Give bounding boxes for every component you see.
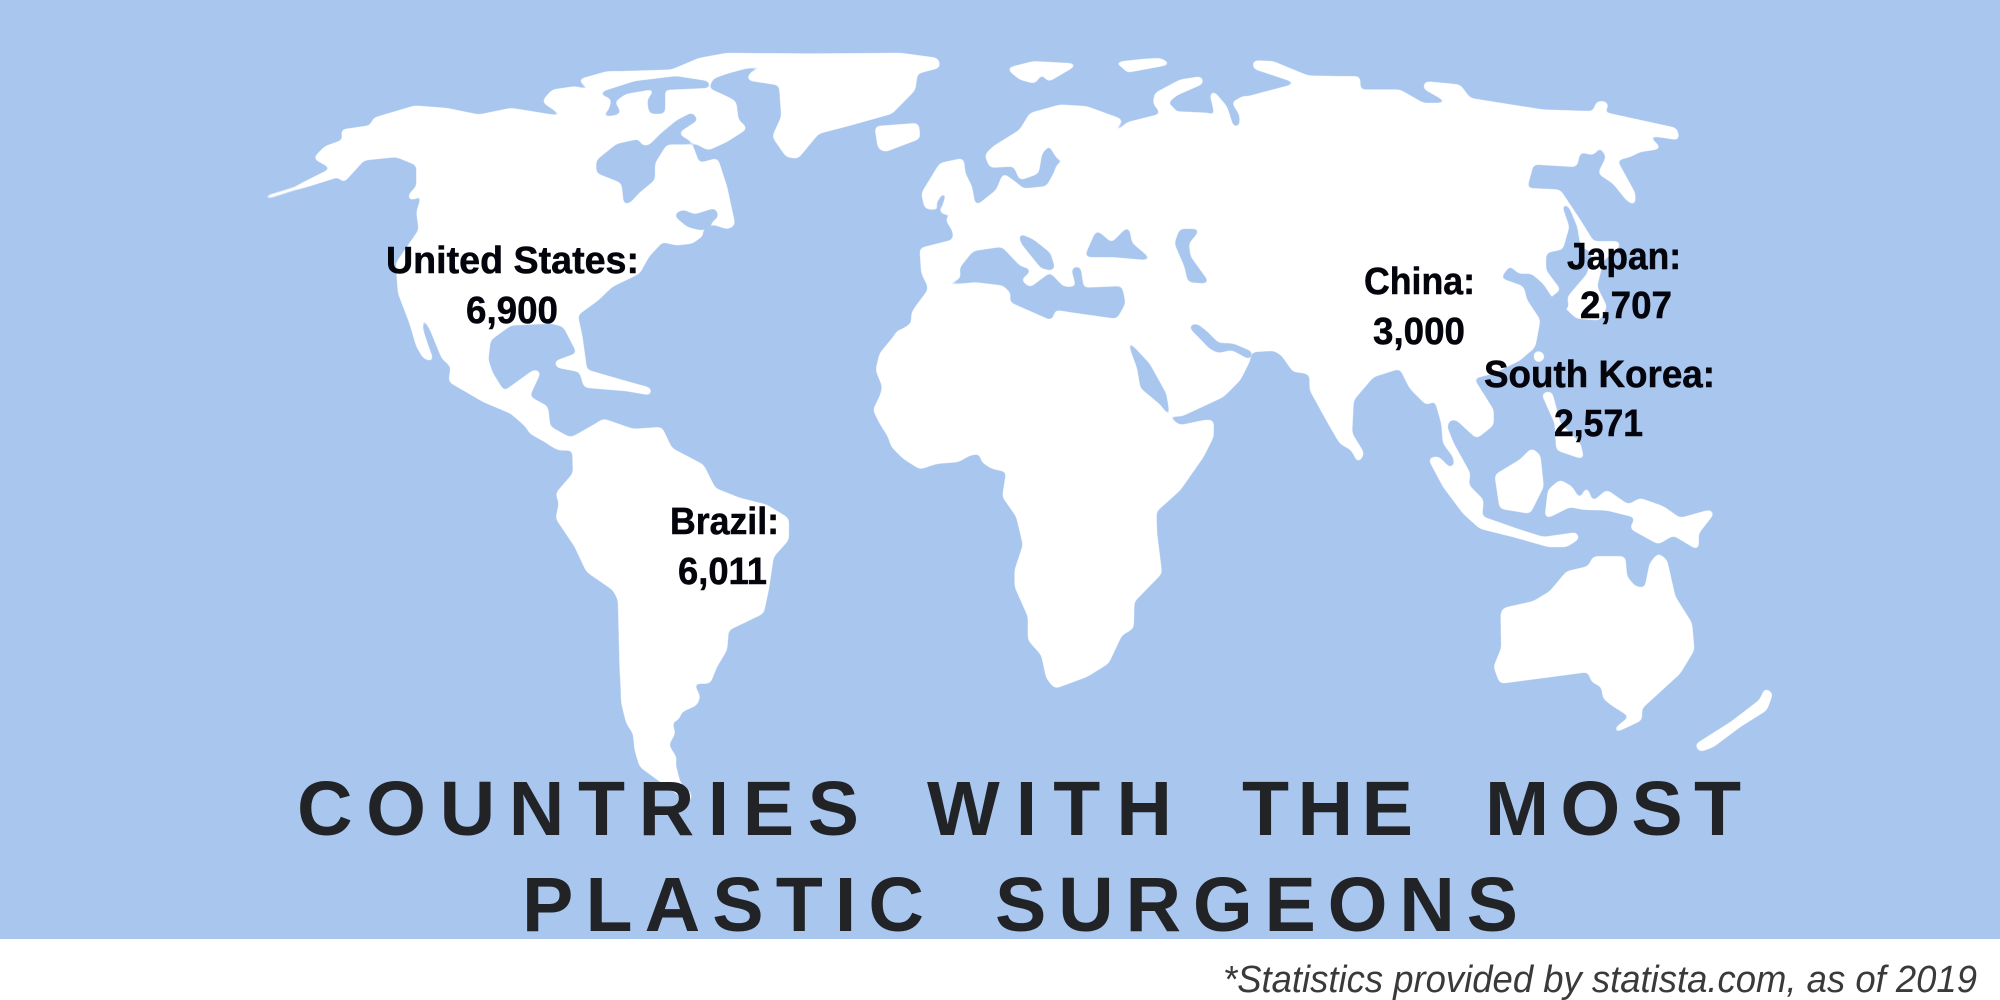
map: Arctic channels and Gulf of St Lawrence: [598, 77, 720, 230]
map: Taiwan and Philippines: [1534, 351, 1584, 459]
map: Africa: [873, 283, 1213, 688]
map: Iceland, Svalbard and Arctic islands: [875, 58, 1172, 152]
map: New Zealand: [1695, 688, 1773, 752]
label: Japan: Japan:: [1567, 236, 1681, 278]
map: Europe, Arabia and northern Asia: [893, 61, 1360, 416]
map: Sea of Japan: [1547, 203, 1592, 313]
map: Australia: [1494, 553, 1694, 733]
map: South America: [493, 400, 788, 801]
map: Borneo, Sulawesi and New Guinea: [1495, 448, 1714, 550]
title: [297, 766, 1741, 948]
label: United States: United States:: [386, 240, 639, 282]
label: Brazil: 6,011: [678, 551, 767, 593]
map: Malay peninsula, Sumatra and Java: [1428, 400, 1579, 547]
label: Brazil: Brazil:: [670, 501, 779, 543]
label: South Korea: [1484, 354, 1715, 445]
title: PLASTIC: [522, 862, 924, 948]
title: THE: [1242, 766, 1413, 852]
label: United States: [386, 240, 639, 332]
map: East and South Asia: [1240, 77, 1679, 463]
label: United States: 6,900: [466, 290, 558, 332]
label: China: [1364, 261, 1475, 353]
label: Japan: [1567, 236, 1681, 327]
label: South Korea: 2,571: [1554, 403, 1643, 445]
label: China: 3,000: [1373, 311, 1465, 353]
label: China: China:: [1364, 261, 1475, 303]
label: Brazil: [670, 501, 779, 593]
world map: [263, 53, 1773, 801]
map: Mediterranean, Adriatic, Black and Caspian seas: [936, 227, 1209, 320]
title: WITH: [927, 766, 1172, 852]
title: MOST: [1485, 766, 1741, 852]
title: SURGEONS: [995, 862, 1518, 948]
title: COUNTRIES: [297, 766, 859, 852]
label: Japan: 2,707: [1580, 285, 1672, 327]
map: North America and Greenland: [263, 53, 940, 450]
label: South Korea: South Korea:: [1484, 354, 1715, 396]
map: Persian Gulf: [1188, 324, 1253, 359]
